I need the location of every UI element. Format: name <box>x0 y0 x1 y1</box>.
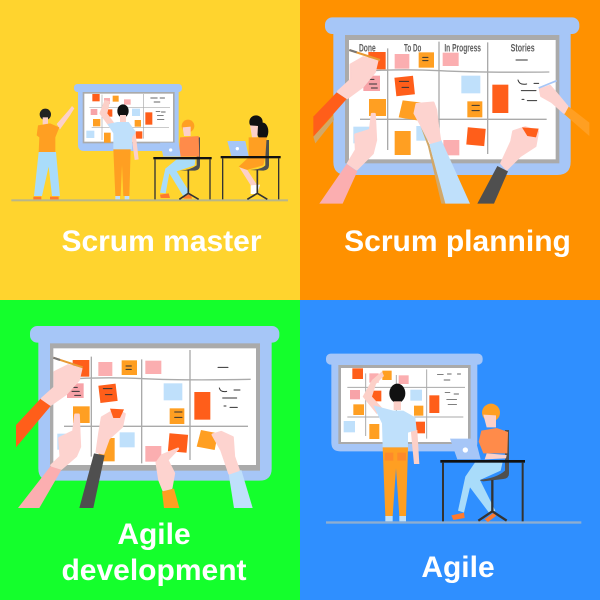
hand: orange sleeve writing <box>539 81 589 136</box>
kanban board <box>30 326 279 481</box>
floor line <box>11 199 288 201</box>
panel: scrum planning <box>300 0 600 300</box>
person with orange hair at desk <box>153 120 212 199</box>
column headers: Done <box>359 42 376 54</box>
kanban board: Stories <box>511 42 535 54</box>
panel: scrum master <box>0 0 300 300</box>
illustration: team at the board <box>11 84 288 201</box>
heading: scrum planning: Scrum planning <box>344 225 571 258</box>
sticky notes <box>368 52 386 69</box>
woman with dark hair at desk <box>221 115 281 199</box>
hand: dark sleeve holding note <box>79 409 125 508</box>
hand: blue sleeve holding note <box>415 103 470 204</box>
panel: agile development: development <box>61 554 247 587</box>
person pointing <box>33 106 74 199</box>
hand: orange sleeve pointing <box>157 449 179 508</box>
kanban board: To Do <box>404 42 421 54</box>
hand: orange sleeve with pencil <box>16 358 83 447</box>
kanban board <box>326 354 483 451</box>
person at board <box>363 371 419 521</box>
kanban board <box>325 17 579 175</box>
panel: agile development <box>0 300 300 600</box>
illustration: hands on the board <box>313 17 589 204</box>
kanban board <box>74 84 182 151</box>
hand: pink sleeve pointing <box>319 114 376 204</box>
heading: agile: Agile <box>421 551 495 584</box>
sticky notes <box>73 360 89 377</box>
heading: agile development: Agile <box>117 518 191 551</box>
kanban board: In Progress <box>444 42 481 54</box>
illustration: two people at the board <box>326 354 581 524</box>
hand: orange sleeve with pencil <box>313 50 380 143</box>
hand: dark sleeve holding note <box>477 127 539 204</box>
hand: pink sleeve pointing <box>18 415 80 508</box>
person at board <box>99 100 139 199</box>
hand: blue sleeve holding note <box>213 432 253 508</box>
illustration: hands on the board <box>16 326 279 508</box>
floor line <box>326 521 581 524</box>
panel: agile <box>300 300 600 600</box>
heading: scrum master: Scrum master <box>61 225 262 258</box>
person at desk <box>440 404 525 522</box>
